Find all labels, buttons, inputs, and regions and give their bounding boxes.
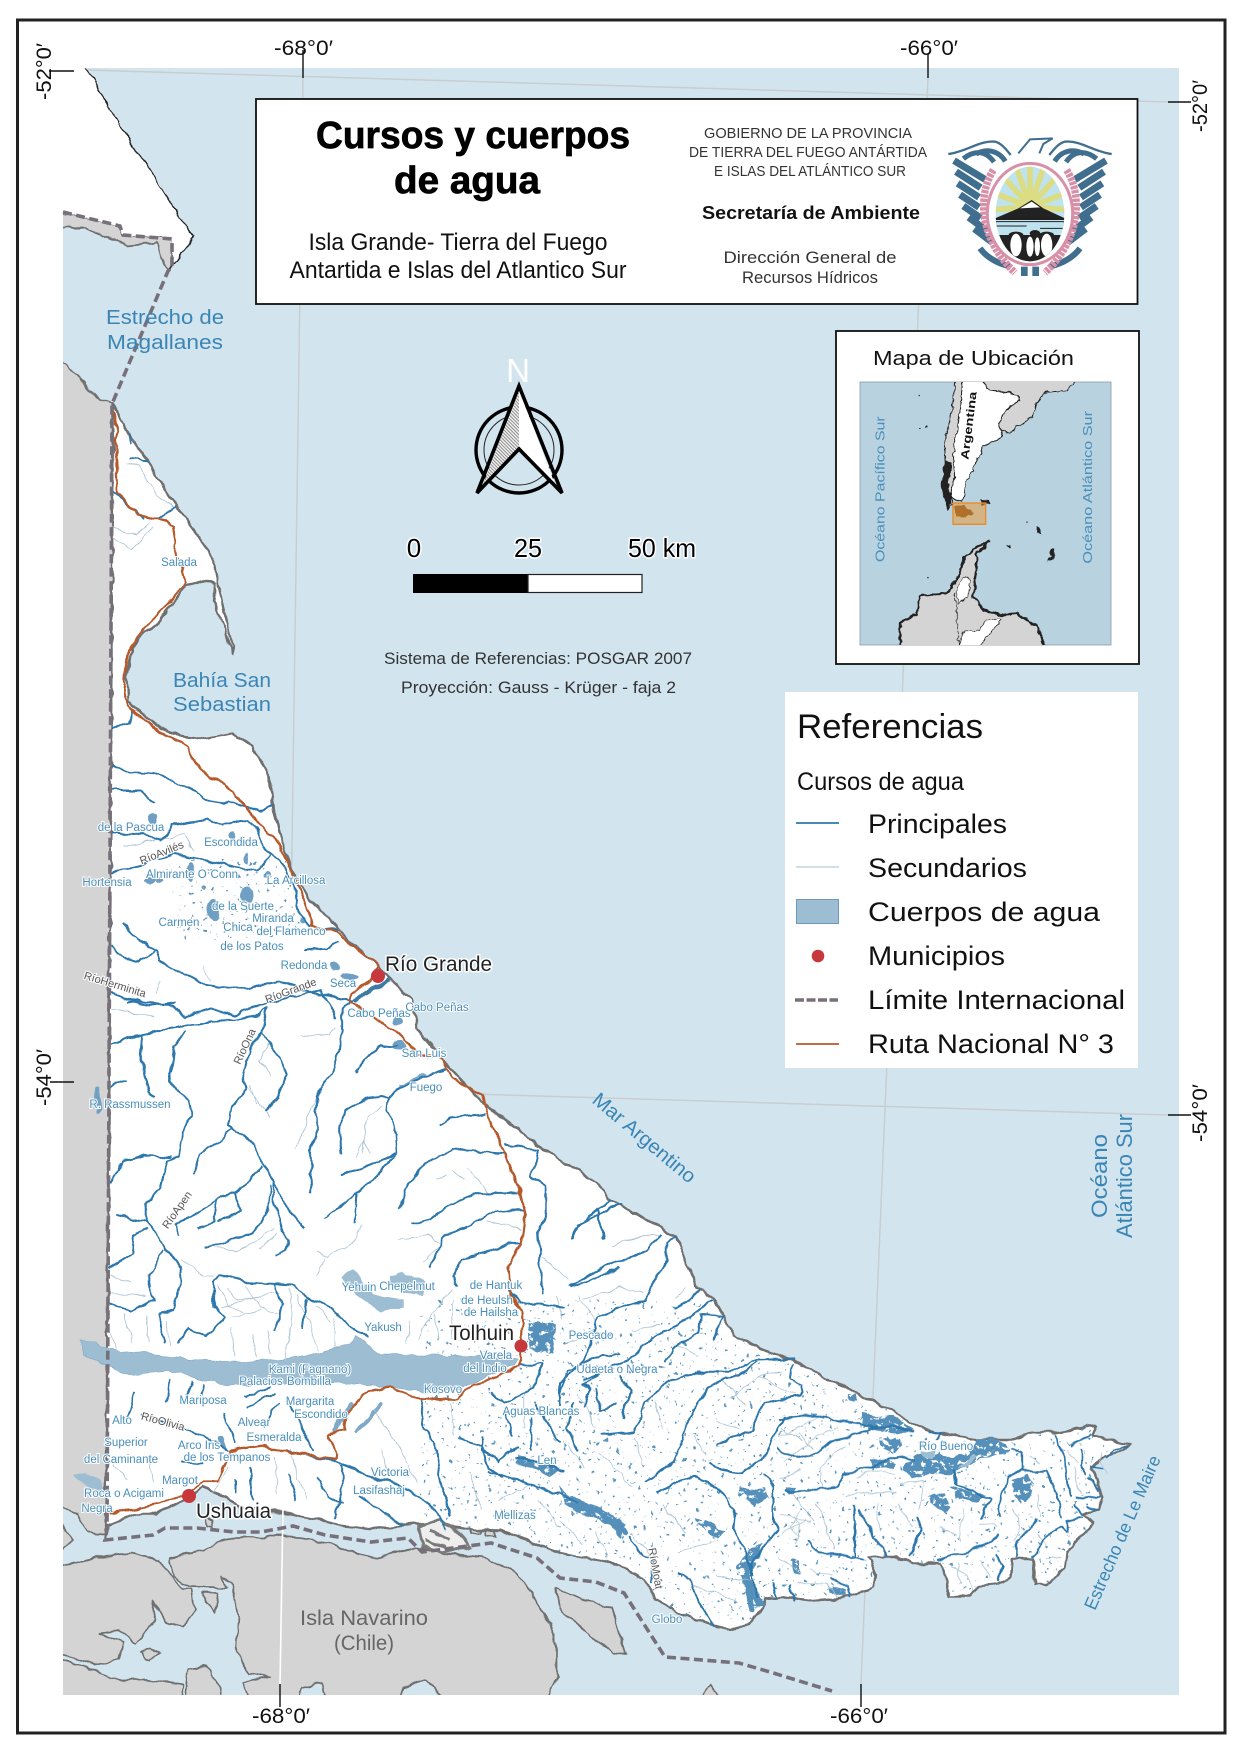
water names: Almirante O`Conn [146, 869, 238, 881]
secondary streams north [112, 463, 210, 1017]
government text: Recursos Hídricos [742, 269, 878, 287]
town labels [196, 953, 514, 1523]
water names: Alvear [238, 1417, 270, 1429]
water names: Lasifashaj [353, 1485, 405, 1497]
water names: Margot [162, 1475, 199, 1487]
water names: Kami (Fagnano) [269, 1364, 351, 1376]
water names: Chica [223, 922, 253, 934]
town labels: Tolhuin [449, 1322, 514, 1345]
water names: Varela [480, 1350, 513, 1362]
water names: Bombilla [287, 1376, 332, 1388]
water names: Yehuin [342, 1282, 376, 1294]
water names: Udaeta o Negra [576, 1364, 658, 1376]
water names: Margarita [286, 1396, 335, 1408]
title: Cursos y cuerpos [316, 115, 630, 157]
water names: Negra [81, 1503, 113, 1515]
main rivers [110, 1000, 620, 1529]
location map: Argentina [959, 390, 980, 460]
water names: de la Pascua [98, 822, 165, 834]
lake Chepelmut [390, 1271, 424, 1296]
small lakes [95, 813, 406, 1451]
water names: Roca o Acigami [84, 1488, 164, 1500]
water names: Río Bueno [919, 1441, 973, 1453]
water names: Hortensia [82, 877, 132, 889]
coordinate ticks and labels: -54°0′ [1189, 1084, 1212, 1142]
secondary streams east [560, 1234, 813, 1601]
water names: de los Tempanos [184, 1452, 271, 1464]
town labels: Ushuaia [196, 1500, 271, 1523]
sea names: Magallanes [107, 332, 223, 354]
subtitle [290, 229, 626, 284]
neighbouring land: Chile and southern islands [50, 209, 729, 1705]
water names: Miranda [252, 913, 294, 925]
icon: provincial coat of arms [948, 138, 1112, 276]
legend item: secondary rivers: Secundarios [868, 853, 1027, 883]
water names: Yakush [364, 1322, 402, 1334]
water names: de Hantuk [470, 1280, 522, 1292]
title [316, 115, 630, 202]
river names [82, 839, 664, 1590]
rivers: central and southwest basin [110, 1000, 620, 1529]
sea names: Bahía San [173, 670, 271, 692]
solid wetland channels [572, 1498, 752, 1610]
mainland coastline [86, 68, 193, 271]
main rivers north [112, 436, 388, 1017]
government text: Dirección General de [724, 249, 896, 267]
water names: Mariposa [179, 1395, 227, 1407]
government text: GOBIERNO DE LA PROVINCIA [704, 126, 912, 142]
rivers: eastern peninsula [778, 1415, 1127, 1600]
rivers: northern sector [112, 436, 388, 1017]
water names: de los Patos [220, 941, 284, 953]
water names: Victoria [371, 1467, 410, 1479]
lake Roca [74, 1472, 106, 1489]
river names: RíoApen [160, 1189, 195, 1231]
water names: Escondida [204, 837, 258, 849]
river names: RíoOlivia [140, 1411, 187, 1434]
water names: Palacios [239, 1376, 283, 1388]
legend item: water bodies [796, 897, 1101, 927]
elongated lakes [335, 1075, 424, 1432]
pale lake near Río Bueno [920, 1449, 977, 1468]
sea names: Estrecho de Le Maire [1080, 1452, 1165, 1613]
government text: Secretaría de Ambiente [702, 203, 920, 223]
location map: Océano Pacífico Sur [874, 416, 888, 562]
water names: de Heulsh [461, 1295, 513, 1307]
lake Yehuin [342, 1268, 405, 1311]
projection note: Sistema de Referencias: POSGAR 2007 [384, 649, 692, 668]
lake Fagnano [81, 1337, 517, 1391]
water names: Mellizas [494, 1510, 536, 1522]
white graticule over Navarino [280, 1507, 283, 1684]
wetlands [518, 1321, 1035, 1605]
water names: Esmeralda [247, 1432, 302, 1444]
legend panel [785, 692, 1138, 1068]
water names: del Indio [463, 1363, 507, 1375]
Isla Navarino label [300, 1607, 428, 1655]
municipalities [182, 969, 528, 1503]
water names: Aguas Blancas [503, 1406, 580, 1418]
water names: Salada [161, 557, 198, 569]
scale bar [407, 533, 696, 593]
sea names: Estrecho de [106, 307, 224, 329]
water names: Fuego [410, 1082, 442, 1094]
water names: R. Rassmussen [89, 1099, 171, 1111]
Isla Navarino label: (Chile) [334, 1632, 394, 1655]
northern Argentina mainland [50, 40, 193, 271]
coordinate ticks and labels: -66°0′ [900, 37, 958, 60]
projection note [384, 649, 692, 697]
water names: Seca [330, 978, 357, 990]
coordinate ticks and labels: -68°0′ [274, 37, 333, 60]
legend title: Referencias [797, 708, 983, 746]
Isla Grande de Tierra del Fuego [106, 404, 1129, 1630]
sea names [106, 307, 1165, 1613]
north arrow: N [506, 352, 530, 389]
sea names: Sebastian [173, 694, 271, 716]
subtitle: Antartida e Islas del Atlantico Sur [290, 257, 626, 284]
scale bar: 25 [514, 533, 542, 563]
national route 3 [110, 408, 526, 1514]
legend item: water bodies: Cuerpos de agua [868, 897, 1101, 927]
legend subtitle: Cursos de agua [797, 768, 964, 796]
water names: San Luis [402, 1048, 447, 1060]
coordinate ticks and labels: -66°0′ [830, 1705, 888, 1728]
water names: Chepelmut [379, 1281, 436, 1293]
water names: Carmen [159, 917, 199, 929]
north arrow [476, 352, 562, 493]
government text: E ISLAS DEL ATLÁNTICO SUR [714, 163, 906, 180]
Isla Navarino label: Isla Navarino [300, 1607, 428, 1630]
water names: Cabo Peñas [347, 1008, 411, 1020]
main rivers east [560, 1201, 802, 1626]
water names: Len [537, 1455, 557, 1467]
town labels: Río Grande [385, 953, 492, 976]
scale bar: 0 [407, 533, 421, 563]
rivers: eastern sector west part [560, 1201, 813, 1626]
river names: RíoHerminita [82, 970, 148, 1001]
location map title: Mapa de Ubicación [873, 348, 1074, 370]
water names: Arco Iris [178, 1440, 220, 1452]
location map: Océano Atlántico Sur [1081, 411, 1095, 564]
scale bar: 50 km [628, 533, 696, 563]
water names: de Hailsha [464, 1307, 519, 1319]
scattered ponds [170, 860, 1140, 1620]
water names: Globo [652, 1614, 682, 1626]
coordinate ticks and labels: -52°0′ [33, 43, 56, 100]
water names: Pescado [569, 1330, 613, 1342]
water names: Escondido [294, 1409, 348, 1421]
coordinate ticks and labels: -54°0′ [33, 1049, 56, 1106]
river names: RíoOna [232, 1026, 259, 1066]
water names: de la Suerte [212, 901, 274, 913]
projection note: Proyección: Gauss - Krüger - faja 2 [401, 678, 676, 697]
coordinate ticks and labels: -52°0′ [1189, 80, 1212, 132]
location map [860, 377, 1111, 650]
secondary streams peninsula [780, 1417, 1107, 1597]
water names: del Flamenco [256, 926, 326, 938]
water names [81, 557, 973, 1626]
title panel [256, 99, 1138, 304]
river names: RíoGrande [264, 976, 318, 1006]
legend item: route 3: Ruta Nacional N° 3 [868, 1029, 1114, 1059]
legend item: municipalities: Municipios [868, 941, 1005, 971]
water names: Cabo Peñas [405, 1002, 469, 1014]
sea names: Océano [1087, 1134, 1112, 1218]
legend item: international boundary: Límite Internacional [868, 985, 1125, 1015]
water names: La Arcillosa [267, 875, 326, 887]
title: de agua [394, 160, 541, 202]
government text [689, 126, 927, 287]
secondary streams [110, 1029, 596, 1529]
water bodies [74, 1268, 517, 1489]
water names: Superior [104, 1437, 148, 1449]
water names: Redonda [281, 960, 328, 972]
government text: DE TIERRA DEL FUEGO ANTÁRTIDA [689, 144, 927, 161]
sea names: Atlántico Sur [1112, 1114, 1137, 1238]
location map panel [836, 331, 1139, 664]
water names: Kosovo [424, 1384, 462, 1396]
water names: Alto [112, 1415, 132, 1427]
Gable island [418, 1520, 470, 1552]
sea names: Mar Argentino [588, 1089, 700, 1188]
main rivers peninsula [778, 1415, 1127, 1600]
subtitle: Isla Grande- Tierra del Fuego [308, 229, 608, 256]
river names: RíoMoat [645, 1547, 664, 1590]
legend item: main rivers: Principales [868, 809, 1007, 839]
water names: del Caminante [84, 1454, 158, 1466]
coordinate ticks and labels: -68°0′ [252, 1705, 310, 1728]
river names: RíoAvilés [138, 839, 186, 867]
legend item: municipalities [812, 941, 1005, 971]
international boundary [63, 212, 832, 1691]
